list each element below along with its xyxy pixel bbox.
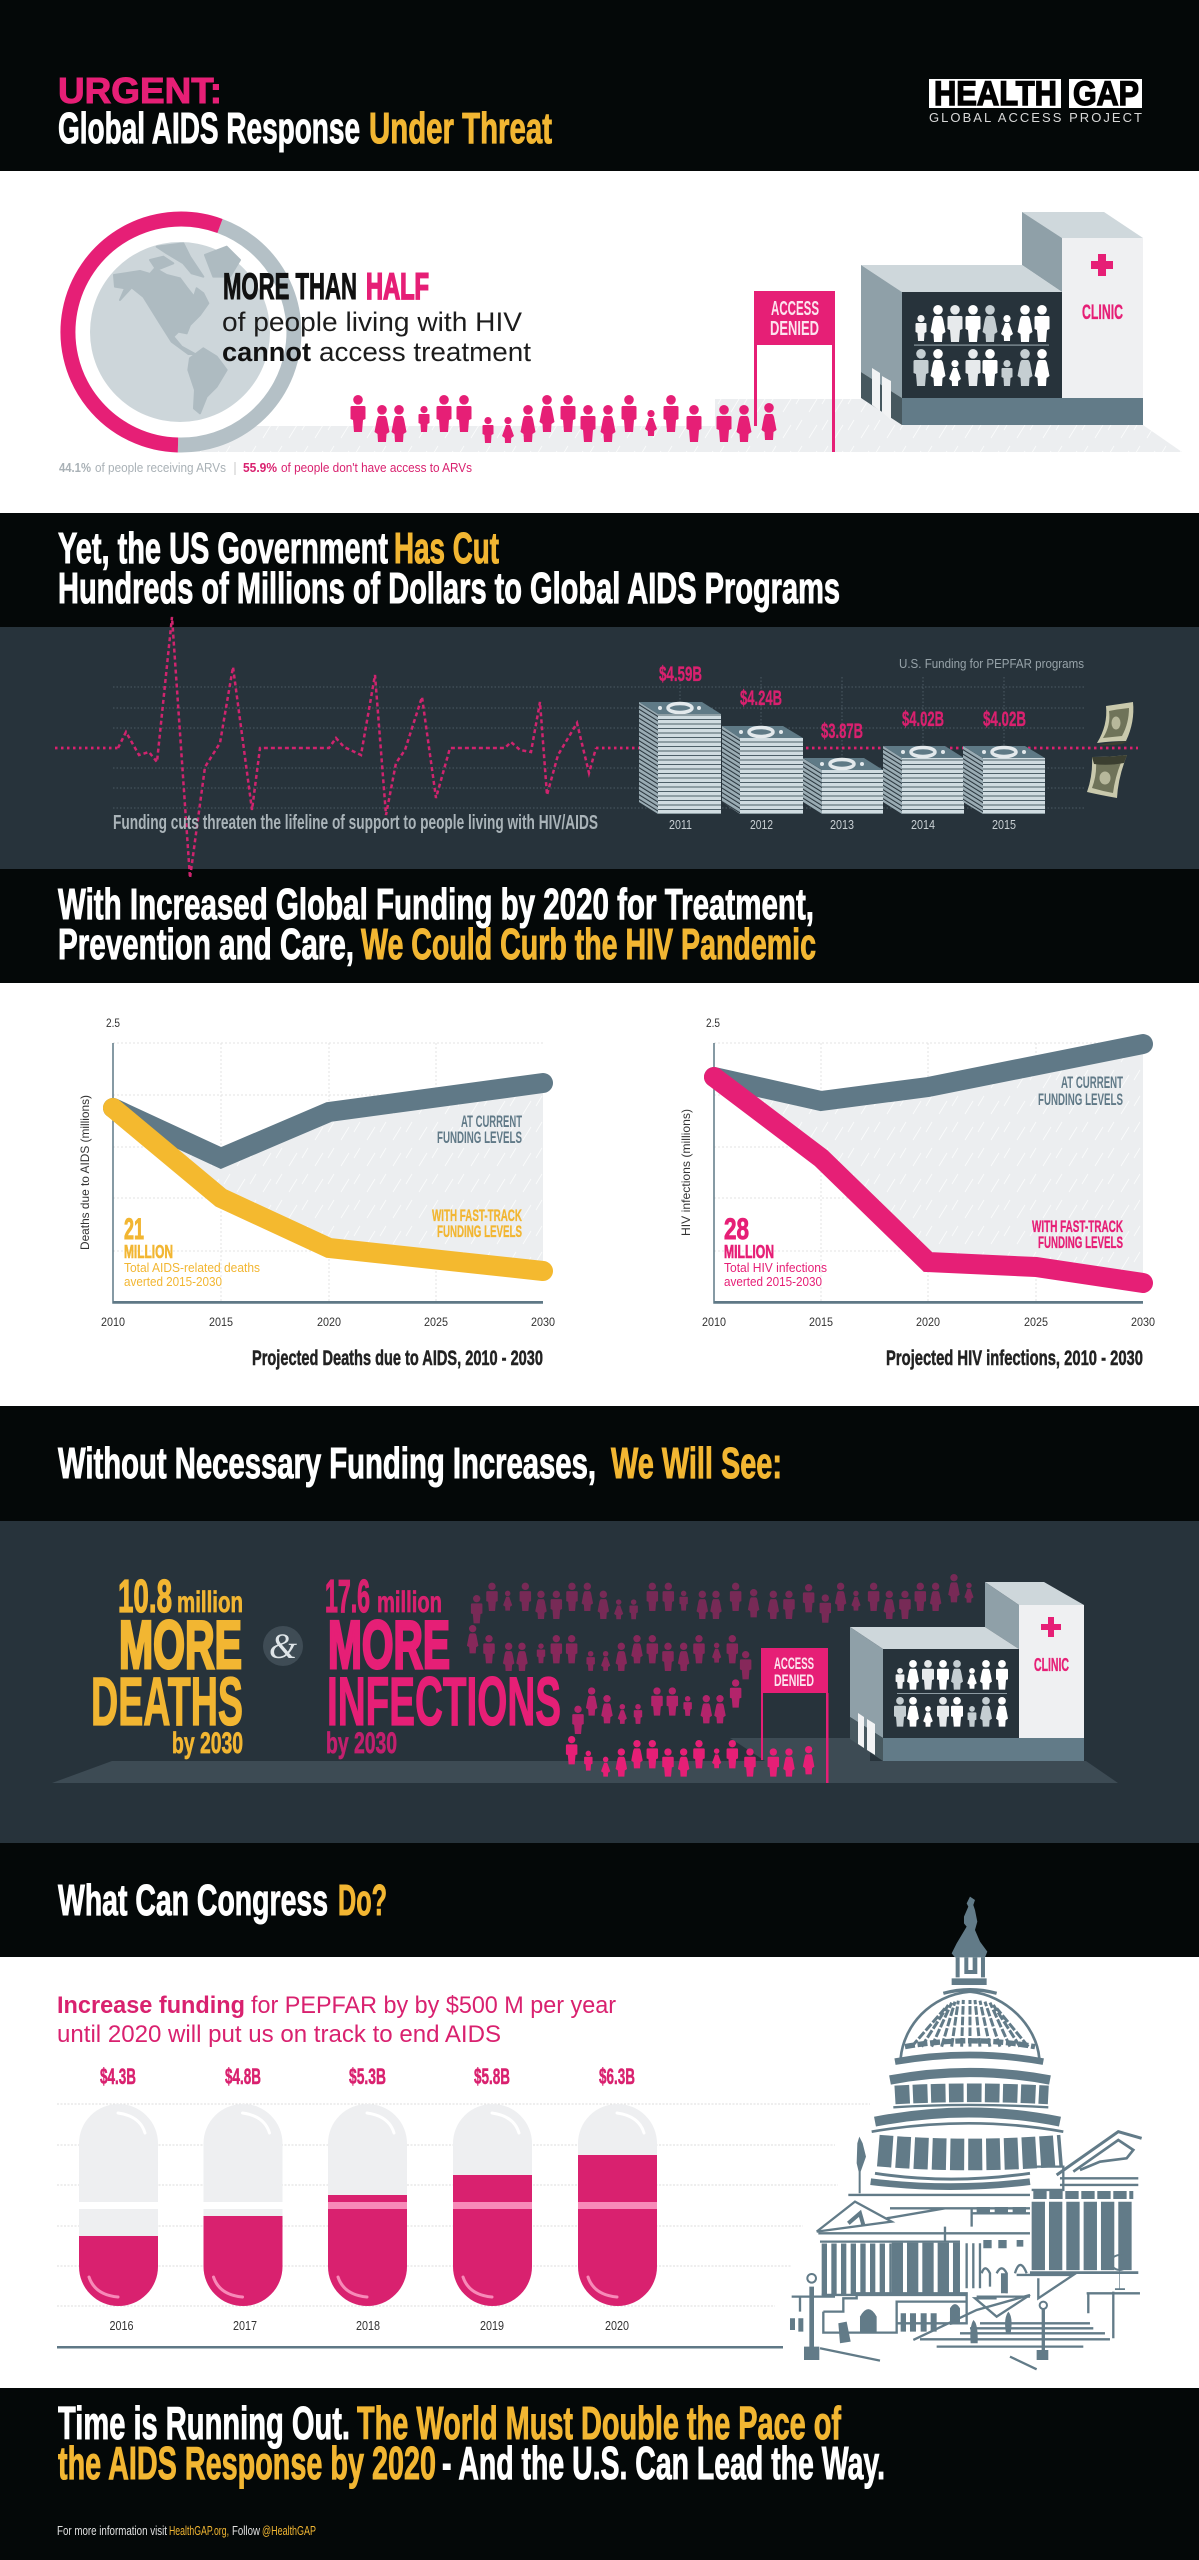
capsule years: 2018 bbox=[356, 2318, 380, 2333]
title: Under Threat bbox=[369, 104, 552, 153]
text: increase funding: Increase funding bbox=[57, 1992, 245, 2019]
stack 2015 bbox=[963, 746, 1045, 814]
logo: Health GAP bbox=[929, 75, 1142, 125]
queue row: nearest bbox=[566, 1736, 814, 1777]
heading: without funding: Without Necessary Funding Increases, bbox=[58, 1440, 596, 1488]
heading: increased funding: We Could Curb the HIV Pandemic bbox=[361, 921, 816, 969]
stat: more infections bbox=[325, 1570, 561, 1760]
capsule chart bbox=[57, 2064, 783, 2348]
funding values: $4.24B bbox=[740, 687, 782, 710]
axis labels bbox=[679, 1016, 1155, 1329]
year labels: 2011 bbox=[669, 817, 692, 832]
funding values: $4.59B bbox=[659, 663, 702, 686]
capitol flag bbox=[857, 2137, 866, 2193]
access denied sign bbox=[754, 291, 835, 452]
callout: 21 million: Total AIDS-related deaths bbox=[124, 1261, 260, 1275]
ring: no access bbox=[178, 226, 294, 445]
line: fast-track funding bbox=[714, 1077, 1143, 1283]
year labels: 2013 bbox=[830, 817, 854, 832]
stat: more infections: by 2030 bbox=[326, 1727, 397, 1760]
logo: Health GAP: HEALTH bbox=[934, 75, 1057, 113]
queue row: third bbox=[572, 1679, 741, 1734]
heading: without funding: We Will See: bbox=[611, 1440, 782, 1488]
access denied sign: DENIED bbox=[770, 318, 819, 340]
text: funding cuts threaten: Funding cuts threaten the lifeline of support to people living with HIV/AIDS bbox=[113, 812, 598, 834]
heading: increased funding: With Increased Global Funding by 2020 for Treatment, bbox=[58, 881, 814, 929]
stat: more deaths: MORE bbox=[119, 1607, 242, 1683]
capsule values: $4.3B bbox=[100, 2064, 136, 2089]
capsule 2020 bbox=[578, 2104, 657, 2306]
callout: 28 million: 28 bbox=[724, 1213, 749, 1246]
capsule 2018 bbox=[328, 2104, 407, 2306]
chart: projected infections bbox=[679, 1016, 1155, 1370]
continents bbox=[114, 243, 240, 413]
stat: more deaths: DEATHS bbox=[91, 1663, 243, 1740]
queue row: farthest bbox=[471, 1574, 974, 1623]
axis labels: Deaths due to AIDS (millions) bbox=[78, 1095, 92, 1250]
year labels bbox=[669, 817, 1016, 832]
chart: projected deaths bbox=[78, 1016, 555, 1370]
clinic label: CLINIC bbox=[1034, 1655, 1069, 1675]
footer: @HealthGAP bbox=[262, 2523, 316, 2538]
heading: US government cuts: Has Cut bbox=[394, 525, 499, 573]
chart gridlines: funding bbox=[113, 677, 1086, 808]
ground: section one bbox=[185, 399, 1182, 452]
capitol dome bbox=[901, 1990, 1039, 2058]
capitol statue and lantern bbox=[952, 1897, 987, 1985]
text: increase funding: until 2020 will put us on track to end AIDS bbox=[57, 2021, 501, 2048]
closing statement: the AIDS Response by 2020 bbox=[58, 2437, 436, 2489]
ECG lifeline bbox=[55, 617, 1138, 878]
axis labels: 2020 bbox=[317, 1315, 341, 1329]
ring: receiving bbox=[68, 219, 220, 445]
stat: more infections: INFECTIONS bbox=[327, 1663, 561, 1740]
capsule values: $6.3B bbox=[599, 2064, 635, 2089]
closing statement: Time is Running Out. bbox=[58, 2397, 350, 2449]
queue of people bbox=[350, 395, 776, 443]
capsule years: 2016 bbox=[110, 2318, 134, 2333]
line: fast-track funding bbox=[113, 1108, 543, 1271]
people inside clinic bbox=[914, 305, 1050, 386]
clinic label: CLINIC bbox=[1082, 301, 1123, 324]
axis labels: 2010 bbox=[101, 1315, 125, 1329]
stack 2012 bbox=[722, 726, 803, 814]
closing statement: The World Must Double the Pace of bbox=[357, 2397, 841, 2449]
footer: HealthGAP.org, bbox=[169, 2523, 229, 2538]
icon: red cross bbox=[1091, 254, 1113, 276]
headline: more than half: access treatment bbox=[319, 337, 532, 367]
heading: US government cuts: Hundreds of Millions of Dollars to Global AIDS Programs bbox=[58, 565, 840, 613]
capitol right wing bbox=[1030, 2132, 1142, 2273]
chart title: Projected Deaths due to AIDS, 2010 - 2030 bbox=[252, 1347, 543, 1370]
text: increase funding: for PEPFAR by by $500 M per year bbox=[251, 1992, 616, 2019]
funding values: $4.02B bbox=[983, 708, 1026, 731]
clinic building bbox=[861, 212, 1143, 425]
heading: US government cuts: Yet, the US Government bbox=[58, 525, 388, 573]
footer bbox=[57, 2523, 316, 2538]
chart: projected infections: WITH FAST-TRACK bbox=[1032, 1217, 1123, 1236]
stack 2011 bbox=[639, 702, 721, 814]
heading: what can congress do: Do? bbox=[338, 1877, 387, 1925]
logo: Health GAP: GAP bbox=[1073, 75, 1139, 113]
stat: more deaths: 10.8 bbox=[118, 1570, 172, 1622]
chart caption: U.S. Funding for PEPFAR programs bbox=[899, 656, 1084, 671]
access denied sign: ACCESS bbox=[771, 298, 819, 320]
year labels: 2014 bbox=[911, 817, 935, 832]
chart: projected infections: FUNDING LEVELS bbox=[1038, 1233, 1123, 1252]
axis labels: 2025 bbox=[424, 1315, 448, 1329]
callout: 28 million: averted 2015-2030 bbox=[724, 1275, 822, 1289]
capsule 2016 bbox=[79, 2104, 158, 2306]
closing statement bbox=[58, 2397, 885, 2489]
chart: projected infections: FUNDING LEVELS bbox=[1038, 1090, 1123, 1109]
capsule years bbox=[110, 2318, 629, 2333]
capsule years: 2017 bbox=[233, 2318, 257, 2333]
line: current funding bbox=[714, 1044, 1143, 1101]
callout: 21 million bbox=[124, 1213, 260, 1289]
icon: ampersand: & bbox=[269, 1626, 297, 1666]
capsule 2017 bbox=[204, 2104, 282, 2306]
capsule values: $4.8B bbox=[225, 2064, 261, 2089]
people inside clinic bbox=[894, 1660, 1008, 1727]
capsule 2019 bbox=[453, 2104, 532, 2306]
clinic building: section four bbox=[850, 1582, 1084, 1761]
caption: ARV percentages: 55.9% bbox=[243, 460, 277, 475]
closing statement: - And the U.S. Can Lead the Way. bbox=[442, 2437, 885, 2489]
line labels: AT CURRENT bbox=[1061, 1073, 1123, 1092]
chart: projected deaths: FUNDING LEVELS bbox=[437, 1128, 522, 1147]
axis labels: 2025 bbox=[1024, 1315, 1048, 1329]
line labels: AT CURRENT bbox=[461, 1112, 522, 1131]
axis labels: 2020 bbox=[916, 1315, 940, 1329]
funding values: $4.02B bbox=[902, 708, 944, 731]
footer: For more information visit bbox=[57, 2523, 167, 2538]
stat: more deaths: million bbox=[177, 1586, 243, 1619]
capitol drum bbox=[871, 2055, 1063, 2187]
capitol lamps and figures bbox=[790, 2255, 1128, 2360]
axis labels: 2.5 bbox=[706, 1016, 720, 1030]
callout: 28 million: MILLION bbox=[724, 1242, 774, 1262]
stack 2013 bbox=[803, 758, 883, 814]
illustration: US Capitol bbox=[790, 1897, 1142, 2369]
caption: ARV percentages: of people don't have access to ARVs bbox=[281, 460, 472, 475]
heading: what can congress do: What Can Congress bbox=[58, 1877, 328, 1925]
capsule values: $5.3B bbox=[349, 2064, 386, 2089]
chart: projected deaths: FUNDING LEVELS bbox=[437, 1222, 522, 1241]
funding values: $3.87B bbox=[821, 720, 863, 743]
callout: 21 million: 21 bbox=[124, 1213, 144, 1246]
queue row: second bbox=[467, 1625, 751, 1679]
capsule years: 2019 bbox=[480, 2318, 504, 2333]
funding values bbox=[659, 663, 1026, 743]
title bbox=[58, 70, 552, 153]
access denied sign: section four bbox=[761, 1648, 828, 1783]
stat: more deaths bbox=[91, 1570, 243, 1760]
callout: 28 million bbox=[724, 1213, 827, 1289]
footer: Follow bbox=[232, 2523, 260, 2538]
headline: more than half: cannot bbox=[222, 337, 311, 367]
heading: increased funding bbox=[58, 881, 816, 969]
stat: more infections: 17.6 bbox=[325, 1570, 370, 1622]
heading: increased funding: Prevention and Care, bbox=[58, 921, 354, 969]
baseline bbox=[57, 2346, 783, 2348]
text: increase funding bbox=[57, 1992, 616, 2048]
logo: Health GAP: GLOBAL ACCESS PROJECT bbox=[929, 110, 1142, 125]
ground: section four bbox=[52, 1738, 1118, 1783]
axis labels bbox=[78, 1016, 555, 1329]
stack 2014 bbox=[883, 746, 964, 814]
access denied sign: section four: DENIED bbox=[774, 1671, 814, 1690]
icon: torn dollar bill bbox=[1087, 702, 1133, 798]
capsule years: 2020 bbox=[605, 2318, 629, 2333]
callout: 28 million: Total HIV infections bbox=[724, 1261, 827, 1275]
stat: more infections: million bbox=[377, 1586, 442, 1619]
axis labels: 2015 bbox=[809, 1315, 833, 1329]
gridlines: pills bbox=[57, 2104, 870, 2306]
axis labels: 2010 bbox=[702, 1315, 726, 1329]
stat: more infections: MORE bbox=[328, 1607, 450, 1683]
capsule values bbox=[100, 2064, 635, 2089]
axis labels: 2030 bbox=[1131, 1315, 1155, 1329]
callout: 21 million: averted 2015-2030 bbox=[124, 1275, 222, 1289]
icon: red cross bbox=[1041, 1617, 1061, 1637]
headline: more than half bbox=[222, 266, 532, 367]
axis labels: 2030 bbox=[531, 1315, 555, 1329]
globe with progress ring bbox=[68, 219, 294, 445]
headline: more than half: of people living with HIV bbox=[222, 307, 522, 337]
year labels: 2015 bbox=[992, 817, 1016, 832]
title: URGENT: bbox=[58, 70, 222, 111]
stat: more deaths: by 2030 bbox=[172, 1727, 243, 1760]
chart: projected deaths: WITH FAST-TRACK bbox=[432, 1206, 522, 1225]
headline: more than half: HALF bbox=[366, 266, 429, 307]
line: current funding bbox=[113, 1083, 543, 1158]
capitol left wing bbox=[817, 2195, 1030, 2295]
money stacks chart bbox=[639, 656, 1084, 832]
queue of people snake bbox=[467, 1574, 974, 1777]
headline: more than half: MORE THAN bbox=[223, 266, 357, 307]
caption: ARV percentages: of people receiving ARVs bbox=[95, 460, 226, 475]
access denied sign: section four: ACCESS bbox=[774, 1654, 814, 1673]
capsule values: $5.8B bbox=[474, 2064, 510, 2089]
heading: US government cuts bbox=[58, 525, 840, 613]
title: Global AIDS Response bbox=[58, 104, 360, 153]
caption: ARV percentages bbox=[59, 460, 472, 475]
axis labels: HIV infections (millions) bbox=[679, 1109, 693, 1236]
callout: 21 million: MILLION bbox=[124, 1242, 173, 1262]
year labels: 2012 bbox=[750, 817, 773, 832]
globe bbox=[90, 242, 270, 422]
axis labels: 2.5 bbox=[106, 1016, 120, 1030]
axis labels: 2015 bbox=[209, 1315, 233, 1329]
caption: ARV percentages: 44.1% bbox=[59, 460, 91, 475]
capitol terrace and steps bbox=[792, 2275, 1140, 2369]
